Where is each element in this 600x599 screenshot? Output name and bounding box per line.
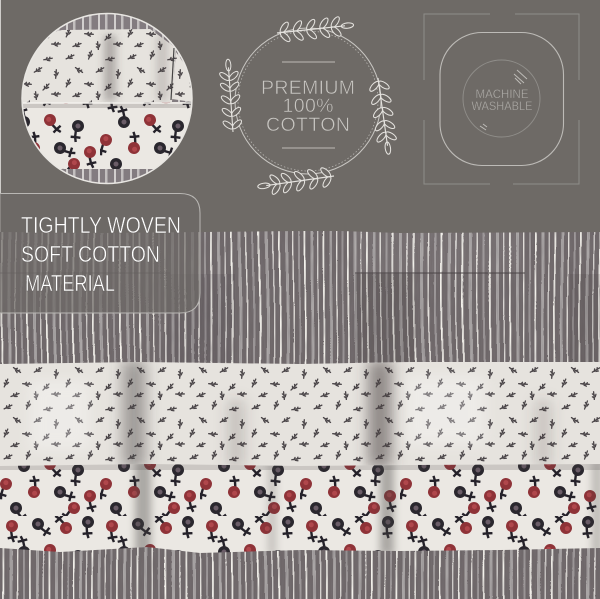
badge text: PREMIUM — [261, 77, 355, 99]
badge text — [261, 77, 355, 136]
machine washable text: MACHINE — [476, 87, 528, 101]
callout text: TIGHTLY WOVEN — [21, 212, 181, 238]
striped curtain fabric — [0, 225, 600, 599]
machine washable text — [472, 87, 532, 113]
photo inset: ruffle close-up — [20, 12, 195, 186]
machine washable text: WASHABLE — [472, 99, 532, 113]
callout text: MATERIAL — [25, 270, 115, 296]
upper ruffle with sprig print — [0, 360, 600, 468]
curtain photo — [0, 225, 600, 599]
lower ruffle with flower print — [0, 460, 600, 555]
callout text: SOFT COTTON — [21, 241, 160, 267]
badge: machine washable — [424, 14, 579, 184]
badge text: COTTON — [266, 114, 350, 136]
badge: premium 100% cotton wreath — [217, 14, 400, 198]
callout panel: tightly woven — [0, 193, 200, 313]
badge text: 100% — [282, 95, 334, 117]
callout text — [21, 212, 181, 296]
wreath branches — [217, 14, 400, 198]
